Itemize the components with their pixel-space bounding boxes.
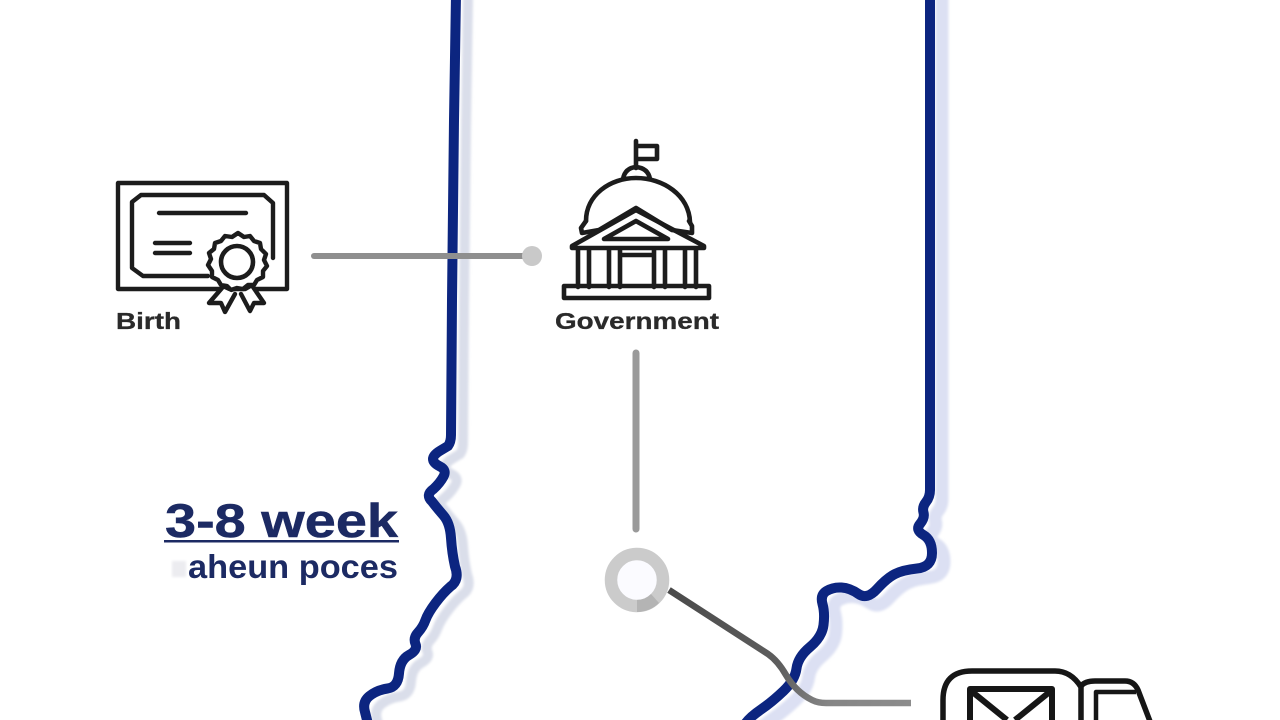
connector: ring to mail <box>669 590 911 703</box>
heading: 3-8 week: 3-8 week <box>165 494 399 547</box>
underline <box>164 540 399 542</box>
map outline shadow: left border <box>376 0 469 720</box>
map outline: left border <box>364 0 457 720</box>
subheading: aheun poces: aheun poces <box>188 548 398 585</box>
duration callout <box>164 494 399 585</box>
faded smudge <box>172 561 186 577</box>
label: Birth: Birth <box>116 308 181 334</box>
map outline shadow: right border <box>757 0 944 720</box>
node ring <box>611 554 663 612</box>
connector: birth to government <box>314 246 542 266</box>
connector: government to ring <box>632 353 640 529</box>
icon: mail truck <box>943 671 1151 720</box>
icon: government building <box>564 141 709 298</box>
label: Government: Government <box>555 308 719 334</box>
icon: birth certificate <box>118 183 287 312</box>
map outline: right border <box>745 0 932 720</box>
